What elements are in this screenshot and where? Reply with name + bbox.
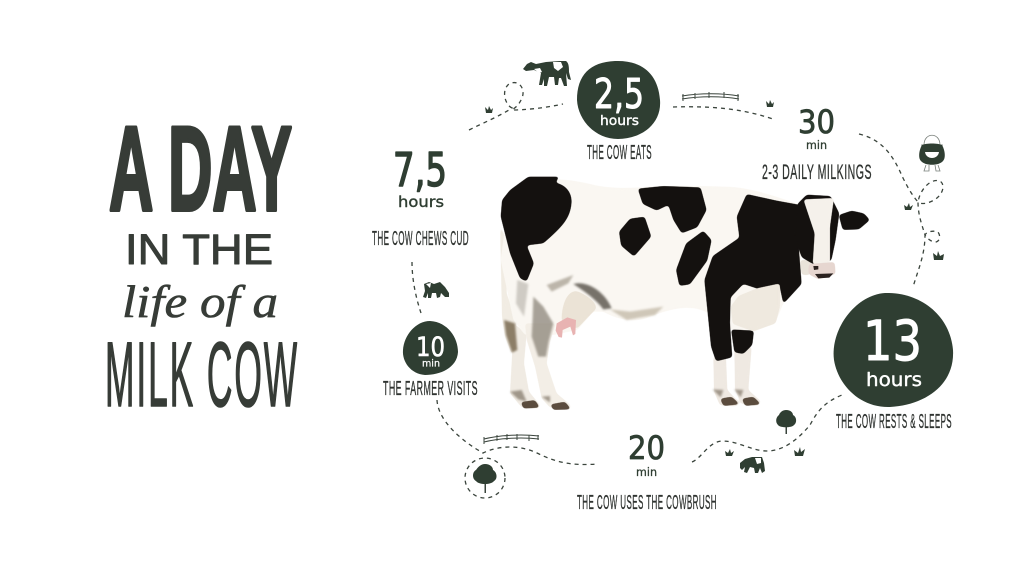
stat: 30 min	[762, 103, 872, 184]
stat: 7,5 hours: 7,5	[393, 143, 447, 197]
icon: standing cow	[523, 61, 571, 86]
hindquarter patch	[501, 177, 572, 282]
stat: 10 min: 10	[416, 332, 445, 363]
face blaze	[803, 198, 834, 265]
belly patch	[676, 231, 712, 286]
icon: tree right	[776, 410, 796, 434]
text: THE COW USES THE COWBRUSH	[577, 492, 717, 514]
stat: 2,5 hours: hours	[600, 113, 639, 129]
stat: 2,5 hours	[577, 61, 660, 164]
blob	[834, 293, 953, 407]
udder body	[562, 291, 596, 328]
hip mud	[547, 275, 573, 292]
icon: fence top	[682, 92, 739, 101]
udder teats	[556, 317, 576, 338]
icon: grazing cow middle	[423, 282, 449, 298]
blob	[577, 61, 660, 139]
stat: 10 min	[383, 321, 478, 400]
icon: grazing cow bottom	[740, 457, 765, 473]
far hind leg	[510, 323, 540, 409]
nostrils and mouth	[813, 266, 833, 278]
belly folds	[610, 307, 663, 320]
icons: grass tufts	[485, 100, 944, 456]
icon: tree in circle	[473, 464, 497, 493]
belly shadow	[573, 283, 612, 309]
text: THE FARMER VISITS	[383, 378, 478, 400]
hooves	[521, 397, 761, 410]
stat: 2,5 hours: 2,5	[594, 70, 644, 118]
stat: 7,5 hours: hours	[398, 193, 444, 211]
title: life of a	[122, 276, 278, 327]
stat: 30 min: min	[806, 138, 827, 152]
head	[794, 195, 839, 265]
neck and shoulder patch	[704, 194, 802, 361]
stat: 20 min: min	[636, 465, 657, 479]
cow tail	[500, 223, 518, 354]
dashed route	[412, 83, 943, 498]
stat: 13 hours	[834, 293, 953, 433]
icon: fence bottom	[484, 434, 539, 444]
illustration: holstein cow	[500, 177, 870, 410]
title	[105, 102, 299, 426]
ear	[839, 211, 870, 230]
chin white	[800, 260, 812, 275]
stat: 13 hours: 13	[863, 309, 922, 373]
hind shadow	[516, 280, 528, 317]
top back patch	[638, 186, 707, 233]
tail switch	[504, 320, 517, 353]
text: MILK COW	[105, 324, 299, 426]
text: THE COW CHEWS CUD	[372, 228, 469, 250]
stat: 7,5 hours	[372, 143, 469, 250]
brisket	[731, 283, 780, 331]
title: IN THE	[125, 226, 273, 274]
stat: 30 min: 30	[798, 103, 835, 141]
near hind leg	[525, 323, 571, 410]
title: A DAY	[109, 102, 292, 236]
muzzle	[808, 262, 836, 279]
rear front leg patch	[731, 329, 754, 354]
stat: 30 min: 2-3 DAILY MILKINGS	[762, 161, 872, 184]
fetlock mud	[510, 389, 743, 403]
cow torso	[501, 179, 802, 335]
stat: 20 min: 20	[628, 429, 665, 467]
stat: 10 min: min	[422, 358, 440, 370]
leg mud	[532, 297, 553, 357]
blob	[403, 321, 458, 375]
text: THE COW EATS	[587, 142, 652, 164]
flank patch	[619, 217, 651, 257]
stat: 13 hours: hours	[866, 369, 922, 391]
icon: farmer mascot	[919, 135, 945, 171]
stat: 20 min	[577, 429, 717, 514]
front legs	[713, 347, 761, 406]
